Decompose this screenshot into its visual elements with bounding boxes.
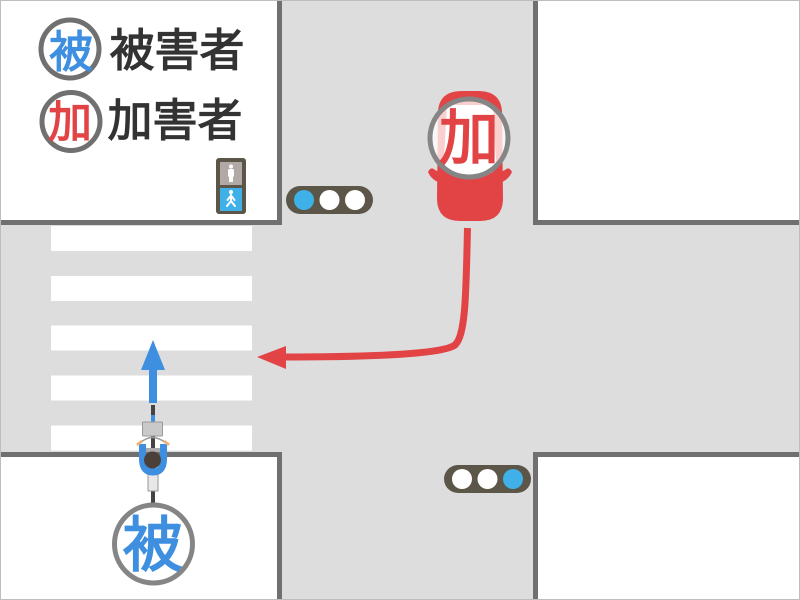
arrow: bicycle path: [141, 340, 165, 403]
legend: offender: 加: [48, 98, 92, 147]
corner block: bottom left: [0, 454, 280, 600]
legend: offender: 加害者: [107, 95, 243, 146]
traffic light: top: [286, 186, 373, 214]
traffic light: bottom: [444, 465, 531, 493]
offender badge: [430, 99, 508, 177]
icon: standing pedestrian: [228, 164, 234, 182]
pedestrian signal: [216, 158, 246, 214]
arrow: car path: [257, 228, 468, 369]
offender badge: 加: [439, 105, 499, 172]
car: [428, 91, 512, 221]
bicycle and rider: [137, 405, 169, 505]
victim badge: [114, 505, 192, 583]
legend: victim: [41, 20, 245, 78]
crosswalk: [51, 226, 252, 450]
legend: victim: 被: [49, 28, 93, 77]
icon: walking pedestrian: [227, 190, 235, 206]
corner block: top left: [0, 0, 280, 222]
corner block: bottom right: [536, 454, 800, 600]
victim badge: 被: [122, 512, 182, 579]
corner block: top right: [536, 0, 800, 222]
legend: victim: 被害者: [109, 25, 245, 76]
legend: offender: [42, 92, 243, 150]
